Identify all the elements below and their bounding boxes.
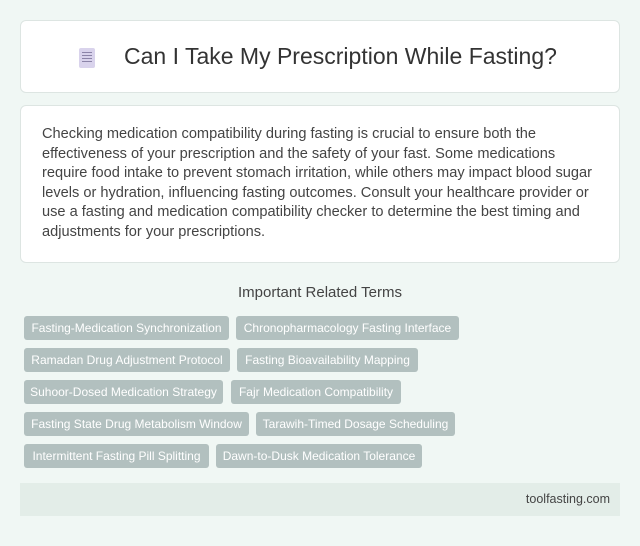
tags: Ramadan Drug Adjustment Protocol <box>31 353 223 367</box>
body text card <box>20 105 620 263</box>
tags: Tarawih-Timed Dosage Scheduling <box>263 417 448 431</box>
tags: Fasting State Drug Metabolism Window <box>31 417 242 431</box>
footer: toolfasting.com <box>526 492 610 506</box>
tags: Suhoor-Dosed Medication Strategy <box>30 385 217 399</box>
tags: Chronopharmacology Fasting Interface <box>244 321 451 335</box>
tags: Dawn-to-Dusk Medication Tolerance <box>223 449 415 463</box>
footer <box>20 483 620 516</box>
header card <box>20 20 620 93</box>
heading: related terms: Important Related Terms <box>238 284 402 301</box>
tags: Fasting-Medication Synchronization <box>31 321 222 335</box>
tags: Intermittent Fasting Pill Splitting <box>32 449 201 463</box>
tags: Fajr Medication Compatibility <box>239 385 393 399</box>
title: Can I Take My Prescription While Fasting? <box>124 43 557 69</box>
tags: Fasting Bioavailability Mapping <box>245 353 410 367</box>
body text card: Checking medication compatibility during fasting is crucial to ensure both the effectiveness of your prescription and the safety of your fast. Some medications require food intake to prevent stomach irritation, while others may impact blood sugar levels or hydration, influencing fasting outcomes. Consult your healthcare provider or use a fasting and medication compatibility checker to determine the best timing and adjustments for your prescriptions. <box>42 126 592 240</box>
icon: prescription <box>79 48 95 68</box>
